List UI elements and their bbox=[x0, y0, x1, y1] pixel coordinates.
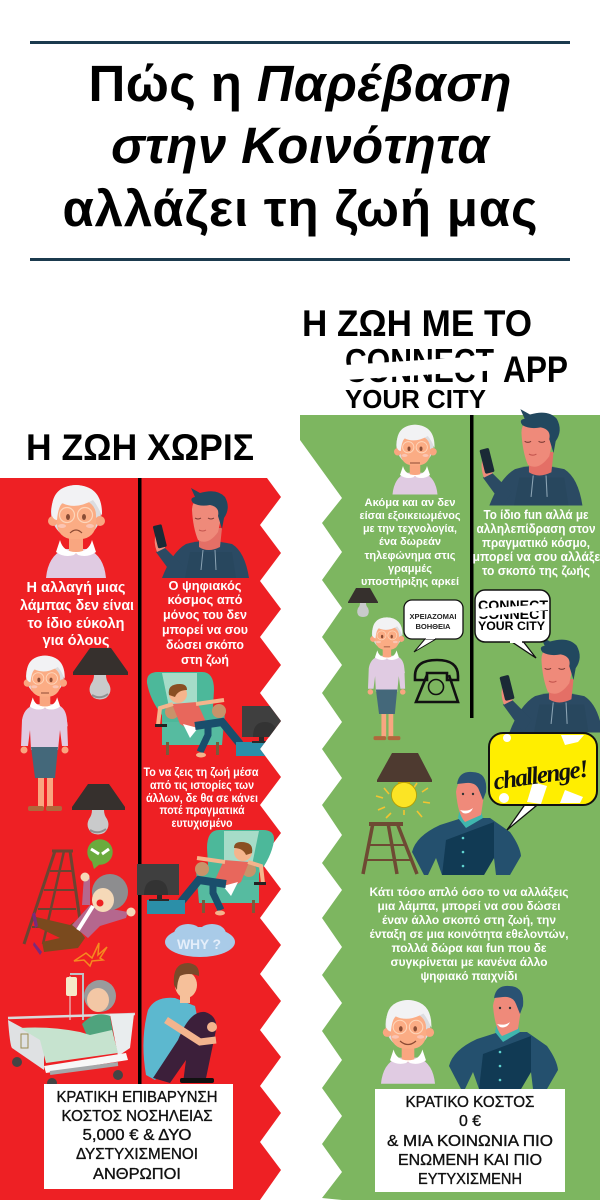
icon: hospital bed with patient bbox=[8, 974, 135, 1088]
callout: cost box: & ΜΙΑ ΚΟΙΝΩΝΙΑ ΠΙΟ bbox=[387, 1133, 553, 1150]
text: same fun with real world interaction bbox=[472, 508, 600, 578]
callout: cost box: 0 € bbox=[459, 1113, 481, 1130]
icon: dark lamp bbox=[73, 648, 128, 700]
text: same fun with real world interaction: πραγματικό κόσμο, bbox=[482, 536, 590, 550]
callout: cost box: ΚΡΑΤΙΚΗ ΕΠΙΒΑΡΥΝΣΗ bbox=[56, 1089, 218, 1106]
text: something as simple as changing a lamp: Κάτι τόσο απλό όσο το να αλλάξεις bbox=[370, 885, 568, 899]
speech bubble: I need help bbox=[404, 600, 463, 652]
text: living through others: από τις ιστορίες των bbox=[150, 778, 254, 792]
icon: wooden step ladder bbox=[363, 823, 417, 874]
icon: WHY thought cloud: WHY ? bbox=[177, 936, 221, 952]
speech bubble: I need help: ΒΟΗΘΕΙΑ bbox=[416, 622, 451, 631]
text: living through others: Το να ζεις τη ζωή μέσα bbox=[144, 765, 259, 779]
text: changing a lamp bbox=[20, 580, 134, 649]
text: digital world: κόσμος από bbox=[168, 592, 243, 607]
text: digital world: δώσει σκόπο bbox=[166, 637, 244, 652]
text: something as simple as changing a lamp: ψηφιακό παιχνίδι bbox=[420, 969, 518, 983]
icon: anger speech bubble bbox=[87, 839, 113, 869]
icon: small dark lamp bbox=[348, 588, 378, 617]
icon: WHY thought cloud bbox=[165, 924, 235, 957]
icon: standing grandmother bbox=[368, 617, 406, 740]
icon: man with phone bbox=[479, 409, 582, 505]
speech bubble: challenge: challenge! bbox=[492, 755, 590, 796]
text: living through others bbox=[144, 765, 259, 830]
text: even if not familiar with technology: ένα δωρεάν bbox=[379, 536, 441, 548]
heading: life with the Connect Your City app: YOUR CITY bbox=[345, 384, 486, 414]
callout: cost box: ΑΝΘΡΩΠΟΙ bbox=[93, 1166, 181, 1183]
heading: life with the Connect Your City app: CONNECT bbox=[345, 352, 494, 389]
callout: cost box bbox=[375, 1089, 565, 1192]
text: same fun with real world interaction: Το ίδιο fun αλλά με bbox=[484, 508, 589, 522]
speech bubble: Connect Your City: YOUR CITY bbox=[478, 619, 545, 633]
text: living through others: ευτυχισμένο bbox=[172, 816, 232, 830]
text: digital world: μπορεί να σου bbox=[162, 622, 248, 637]
icon: smiling grandmother bbox=[381, 1000, 435, 1084]
speech bubble: Connect Your City: CONNECT bbox=[478, 597, 548, 613]
text: digital world: Ο ψηφιακός bbox=[168, 578, 242, 593]
icon: neutral grandmother bbox=[392, 425, 438, 494]
icon: lit lamp with yellow bulb bbox=[376, 753, 432, 818]
callout: cost box: ΕΥΤΥΧΙΣΜΕΝΗ bbox=[418, 1171, 522, 1188]
panel: green, life with the app bbox=[300, 409, 600, 1200]
icon: man with phone bbox=[153, 488, 249, 578]
text: living through others: ποτέ πραγματικά bbox=[160, 803, 245, 817]
text: even if not familiar with technology: Ακόμα και αν δεν bbox=[364, 497, 456, 509]
text: same fun with real world interaction: το σκοπό της ζωής bbox=[482, 564, 590, 578]
callout: cost box: ΚΡΑΤΙΚΟ ΚΟΣΤΟΣ bbox=[406, 1094, 534, 1111]
heading: life with the Connect Your City app: APP bbox=[503, 349, 568, 390]
title line 3: αλλάζει τη ζωή μας bbox=[62, 180, 538, 237]
text: even if not familiar with technology: με την τεχνολογία, bbox=[363, 523, 457, 535]
callout: cost box: ΚΟΣΤΟΣ ΝΟΣΗΛΕΙΑΣ bbox=[62, 1108, 212, 1125]
heading: life with the Connect Your City app bbox=[304, 310, 567, 408]
icon: man with phone, lower bbox=[499, 636, 600, 732]
icon: second dark lamp bbox=[72, 784, 125, 834]
text: something as simple as changing a lamp: έναν άλλο σκοπό στη ζωή, την bbox=[382, 913, 556, 927]
icon: smiling man bbox=[412, 772, 521, 875]
callout: cost box bbox=[44, 1084, 233, 1189]
speech bubble: Connect Your City bbox=[475, 590, 550, 658]
callout: cost box: ΔΥΣΤΥΧΙΣΜΕΝΟΙ bbox=[76, 1146, 198, 1163]
callout: cost box: ΕΝΩΜΕΝΗ ΚΑΙ ΠΙΟ bbox=[398, 1152, 542, 1169]
text: living through others: άλλων, δε θα σε κάνει bbox=[146, 791, 258, 805]
callout: cost box: 5,000 € & ΔΥΟ bbox=[82, 1127, 192, 1144]
text: even if not familiar with technology: τηλεφώνημα στις bbox=[364, 550, 456, 562]
speech bubble: Connect Your City: CONNECT bbox=[478, 606, 548, 622]
icon: smiling man, lower bbox=[449, 986, 558, 1089]
heading: life without: Η ΖΩΗ ΧΩΡΙΣ bbox=[26, 427, 254, 468]
text: something as simple as changing a lamp: ένταξη σε μια κοινότητα εθελοντών, bbox=[370, 927, 568, 941]
title line 2: στην Κοινότητα bbox=[111, 117, 491, 174]
text: changing a lamp: για όλους bbox=[42, 633, 110, 649]
text: even if not familiar with technology: είσαι εξοικειωμένος bbox=[360, 510, 461, 522]
text: changing a lamp: το ίδιο εύκολη bbox=[28, 616, 124, 632]
icon: second man slumped in armchair bbox=[137, 830, 274, 916]
text: digital world: στη ζωή bbox=[181, 652, 229, 667]
text: changing a lamp: λάμπας δεν είναι bbox=[20, 598, 134, 614]
text: something as simple as changing a lamp: πολλά δώρα και fun που δε bbox=[392, 941, 547, 955]
text: even if not familiar with technology bbox=[360, 497, 461, 588]
icon: worried grandmother bbox=[46, 485, 106, 578]
icon: man slumped in armchair watching TV bbox=[147, 672, 284, 758]
text: digital world bbox=[162, 578, 248, 667]
title line 1: Πώς η Παρέβαση bbox=[88, 55, 512, 112]
text: same fun with real world interaction: αλληλεπίδραση στον bbox=[476, 522, 596, 536]
icon: telephone bbox=[415, 660, 458, 702]
icon: grandmother falling off ladder bbox=[24, 851, 136, 966]
text: even if not familiar with technology: υποστήριξης αρκεί bbox=[361, 576, 459, 588]
text: something as simple as changing a lamp: συγκρίνεται με κανένα άλλο bbox=[390, 955, 548, 969]
speech bubble: I need help: ΧΡΕΙΑΖΟΜΑΙ bbox=[410, 612, 456, 621]
heading: life with the Connect Your City app: Η ΖΩΗ ΜΕ ΤΟ bbox=[302, 303, 532, 344]
text: digital world: μόνος του δεν bbox=[163, 607, 247, 622]
speech bubble: challenge bbox=[489, 733, 597, 830]
panel: red, life without bbox=[0, 478, 284, 1200]
icon: sad man sitting, hugging knees bbox=[143, 963, 217, 1083]
text: something as simple as changing a lamp bbox=[370, 885, 568, 983]
text: something as simple as changing a lamp: μια λάμπα, μπορεί να σου δώσει bbox=[378, 899, 560, 913]
text: changing a lamp: Η αλλαγή μιας bbox=[26, 580, 126, 596]
text: even if not familiar with technology: γραμμές bbox=[388, 563, 432, 575]
icon: standing grandmother bbox=[20, 656, 68, 811]
title block bbox=[30, 41, 570, 261]
heading: life with the Connect Your City app: CONNECT bbox=[345, 342, 494, 379]
